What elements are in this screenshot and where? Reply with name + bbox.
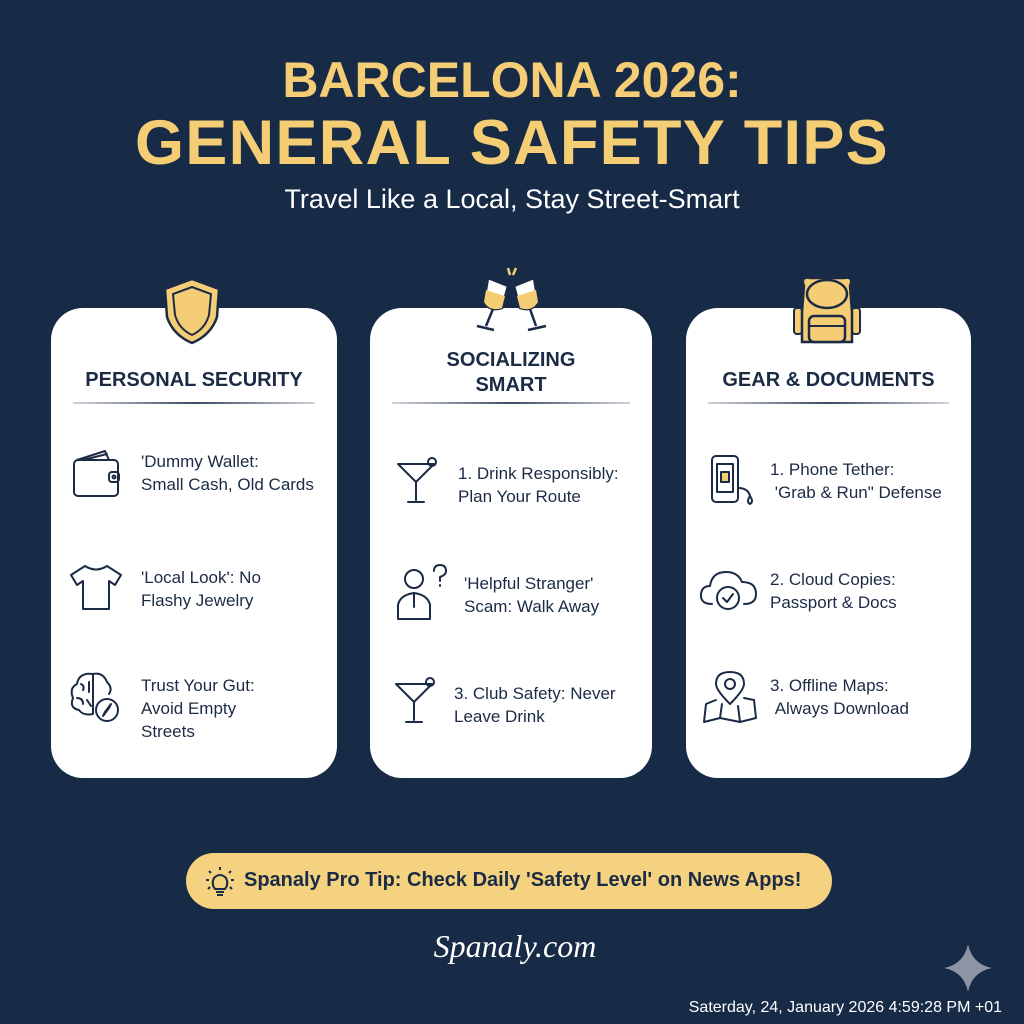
icon: light bulb <box>206 867 234 896</box>
icon: sparkle <box>944 944 992 992</box>
text: club safety <box>454 684 616 726</box>
callout: pro tip <box>186 853 832 909</box>
heading <box>447 349 575 396</box>
text: offline maps <box>770 676 909 718</box>
text: phone tether: 1. Phone Tether: <box>770 460 894 479</box>
text: local look <box>141 568 261 610</box>
text: club safety: 3. Club Safety: Never <box>454 684 616 703</box>
panel: personal security <box>51 308 337 778</box>
text: cloud copies <box>770 570 897 612</box>
text: helpful stranger: Scam: Walk Away <box>464 597 599 616</box>
title: GENERAL SAFETY TIPS <box>135 108 889 178</box>
icon: shield <box>165 280 219 344</box>
icon: person question <box>397 564 447 620</box>
heading: GEAR & DOCUMENTS <box>722 369 935 391</box>
text: drink responsibly <box>458 464 619 506</box>
panel: socializing smart <box>370 308 652 778</box>
text: helpful stranger <box>464 574 600 616</box>
icon: phone tether <box>711 455 753 505</box>
icon: wallet <box>73 450 120 497</box>
icon: champagne glasses <box>476 268 546 332</box>
heading: SOCIALIZING <box>447 349 575 371</box>
text: offline maps: Always Download <box>775 699 909 718</box>
panel: gear & documents <box>686 308 971 778</box>
title <box>135 52 889 178</box>
text: cloud copies: Passport & Docs <box>770 593 897 612</box>
subtitle: Travel Like a Local, Stay Street-Smart <box>284 184 740 214</box>
text: dummy wallet <box>141 452 314 494</box>
logo: spanaly.com: Spanaly.com <box>434 928 596 964</box>
icon: backpack <box>793 278 861 344</box>
text: phone tether: 'Grab & Run" Defense <box>775 483 942 502</box>
text: local look: Flashy Jewelry <box>141 591 253 610</box>
text: trust gut: Streets <box>141 722 195 741</box>
icon: map pin <box>703 671 757 723</box>
icon: martini <box>397 457 437 503</box>
text: dummy wallet: 'Dummy Wallet: <box>141 452 259 471</box>
heading: PERSONAL SECURITY <box>85 369 303 391</box>
text: helpful stranger: 'Helpful Stranger' <box>464 574 593 593</box>
icon: brain compass <box>70 672 119 722</box>
title: BARCELONA 2026: <box>282 52 742 108</box>
text: offline maps: 3. Offline Maps: <box>770 676 889 695</box>
text: dummy wallet: Small Cash, Old Cards <box>141 475 314 494</box>
icon: cloud check <box>700 571 757 610</box>
icon: t-shirt <box>70 565 122 610</box>
text: trust gut <box>141 676 255 741</box>
icon: cocktail <box>395 677 435 723</box>
text: tip: Spanaly Pro Tip: Check Daily 'Safety Level' on News Apps! <box>244 869 801 891</box>
timestamp: Saterday, 24, January 2026 4:59:28 PM +01 <box>689 999 1002 1016</box>
text: phone tether <box>770 460 942 502</box>
text: trust gut: Trust Your Gut: <box>141 676 255 695</box>
text: trust gut: Avoid Empty <box>141 699 236 718</box>
text: drink responsibly: Plan Your Route <box>458 487 581 506</box>
text: local look: 'Local Look': No <box>141 568 261 587</box>
heading: SMART <box>475 374 547 396</box>
text: club safety: Leave Drink <box>454 707 545 726</box>
text: cloud copies: 2. Cloud Copies: <box>770 570 896 589</box>
text: drink responsibly: 1. Drink Responsibly: <box>458 464 619 483</box>
